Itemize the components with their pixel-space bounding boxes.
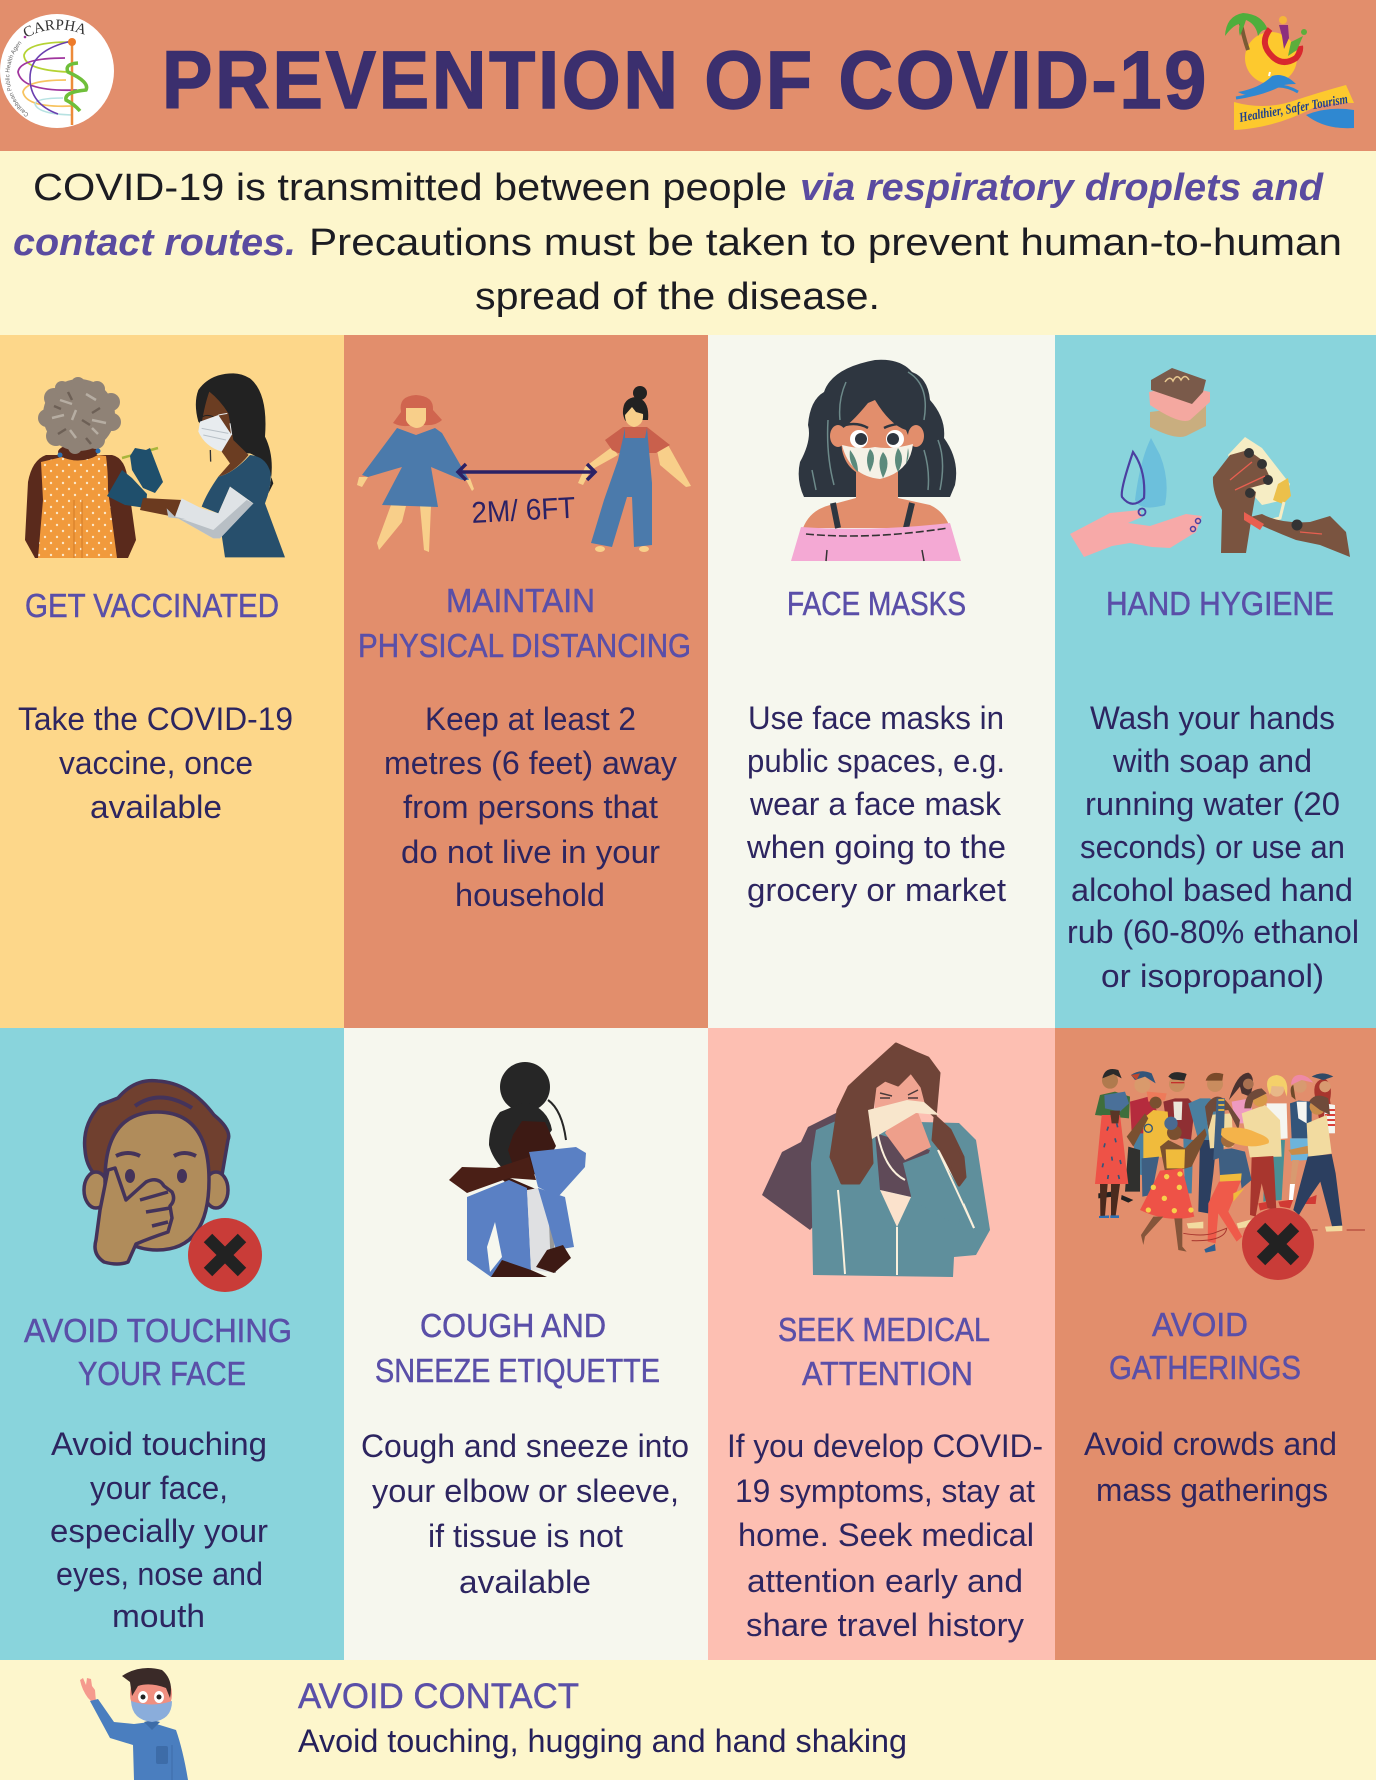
intro statement: contact routes. (13, 222, 296, 264)
heading: MAINTAIN (446, 582, 595, 619)
heading: GATHERINGS (1109, 1349, 1301, 1386)
body text (50, 1426, 268, 1634)
intro statement: spread of the disease. (475, 276, 880, 318)
panel: avoid touching your face (0, 1028, 344, 1660)
body text: Take the COVID-19 (18, 701, 293, 737)
logo: CARPHA (0, 14, 114, 128)
logo: CARPHA: CARPHA (24, 20, 85, 36)
intro statement: via respiratory droplets and (800, 167, 1324, 209)
body text: metres (6 feet) away (384, 745, 677, 781)
body text: when going to the (746, 829, 1006, 865)
body text (18, 701, 293, 825)
front row people (1095, 1088, 1365, 1253)
body text: household (455, 877, 605, 913)
body text (361, 1428, 689, 1600)
body text: eyes, nose and (56, 1556, 263, 1592)
panel: avoid contact (0, 1660, 1376, 1780)
body text: alcohol based hand (1071, 872, 1353, 908)
body text: home. Seek medical (738, 1517, 1034, 1553)
panel: physical distancing (344, 335, 708, 1028)
icon: woman sneezing into elbow (449, 1062, 586, 1277)
body text: rub (60-80% ethanol (1067, 914, 1359, 950)
icon: soap and hands (1070, 368, 1350, 557)
body text: if tissue is not (428, 1518, 623, 1554)
body text: vaccine, once (59, 745, 253, 781)
title: PREVENTION OF COVID-19 (162, 35, 1209, 126)
body text: wear a face mask (749, 786, 1002, 822)
icon: face touching with red cross (84, 1081, 262, 1292)
panel: get vaccinated (0, 335, 344, 1028)
body text: attention early and (747, 1563, 1023, 1599)
body text: Wash your hands (1090, 700, 1335, 736)
heading: SNEEZE ETIQUETTE (375, 1352, 660, 1389)
heading (375, 1307, 660, 1389)
body text: share travel history (746, 1607, 1024, 1643)
body text: your elbow or sleeve, (372, 1473, 679, 1509)
heading: HAND HYGIENE (1106, 585, 1334, 622)
panel: face masks (708, 335, 1055, 1028)
icon: red cross (1242, 1208, 1314, 1280)
body text (1084, 1426, 1337, 1508)
intro statement (0, 151, 1376, 335)
heading: YOUR FACE (78, 1355, 246, 1392)
icon: woman blowing her nose (762, 1044, 990, 1277)
body text: 19 symptoms, stay at (735, 1473, 1035, 1509)
panel: avoid gatherings (1055, 1028, 1376, 1660)
heading: ATTENTION (802, 1355, 973, 1392)
body text: public spaces, e.g. (747, 743, 1005, 779)
header banner (0, 0, 1376, 151)
body text (384, 701, 677, 913)
body text: from persons that (403, 789, 658, 825)
heading: COUGH AND (420, 1307, 606, 1344)
heading: PHYSICAL DISTANCING (358, 627, 691, 664)
heading: SEEK MEDICAL (778, 1311, 990, 1348)
logo: Healthier, Safer Tourism (1225, 13, 1354, 130)
body text: Cough and sneeze into (361, 1428, 689, 1464)
panel: hand hygiene (1055, 335, 1376, 1028)
intro statement: Precautions must be taken to prevent human-to-human (309, 222, 1342, 264)
heading (1109, 1306, 1301, 1386)
heading: AVOID (1152, 1306, 1248, 1343)
back row people (1095, 1069, 1335, 1213)
heading: GET VACCINATED (25, 587, 279, 624)
icon: waving man in mask (80, 1668, 188, 1780)
panel: seek medical attention (708, 1028, 1055, 1660)
icon: two people two metres apart (357, 386, 691, 552)
body text: do not live in your (401, 834, 660, 870)
heading: AVOID TOUCHING (24, 1312, 292, 1349)
body text: mouth (112, 1598, 205, 1634)
body text: or isopropanol) (1101, 958, 1324, 994)
icon: vaccination (25, 373, 285, 558)
icon: woman wearing a face mask (791, 360, 961, 561)
body text: seconds) or use an (1080, 829, 1345, 865)
body text: available (90, 789, 222, 825)
body text: If you develop COVID- (727, 1428, 1043, 1464)
heading (24, 1312, 292, 1392)
heading (778, 1311, 990, 1392)
body text (727, 1428, 1043, 1643)
logo: Healthier, Safer Tourism: Healthier, Safer Tourism (1237, 91, 1349, 125)
body text: Avoid crowds and (1084, 1426, 1337, 1462)
panel: cough and sneeze etiquette (344, 1028, 708, 1660)
icon: crowd with red cross (1095, 1069, 1365, 1280)
body text: grocery or market (747, 872, 1006, 908)
heading: FACE MASKS (787, 585, 966, 622)
body text: your face, (90, 1470, 228, 1506)
body text: Use face masks in (748, 700, 1004, 736)
body text: Avoid touching, hugging and hand shaking (298, 1723, 907, 1759)
body text: mass gatherings (1096, 1472, 1328, 1508)
heading: AVOID CONTACT (298, 1677, 579, 1716)
body text (1067, 700, 1359, 994)
body text: available (459, 1564, 591, 1600)
body text: Keep at least 2 (425, 701, 636, 737)
heading (358, 582, 691, 664)
icon: two people two metres apart: 2M/ 6FT (471, 492, 576, 530)
body text: Avoid touching (51, 1426, 267, 1462)
body text: with soap and (1112, 743, 1312, 779)
body text: running water (20 (1085, 786, 1340, 822)
intro statement: COVID-19 is transmitted between people (33, 167, 787, 209)
body text: especially your (50, 1513, 268, 1549)
body text (746, 700, 1006, 908)
icon: red cross (188, 1218, 262, 1292)
